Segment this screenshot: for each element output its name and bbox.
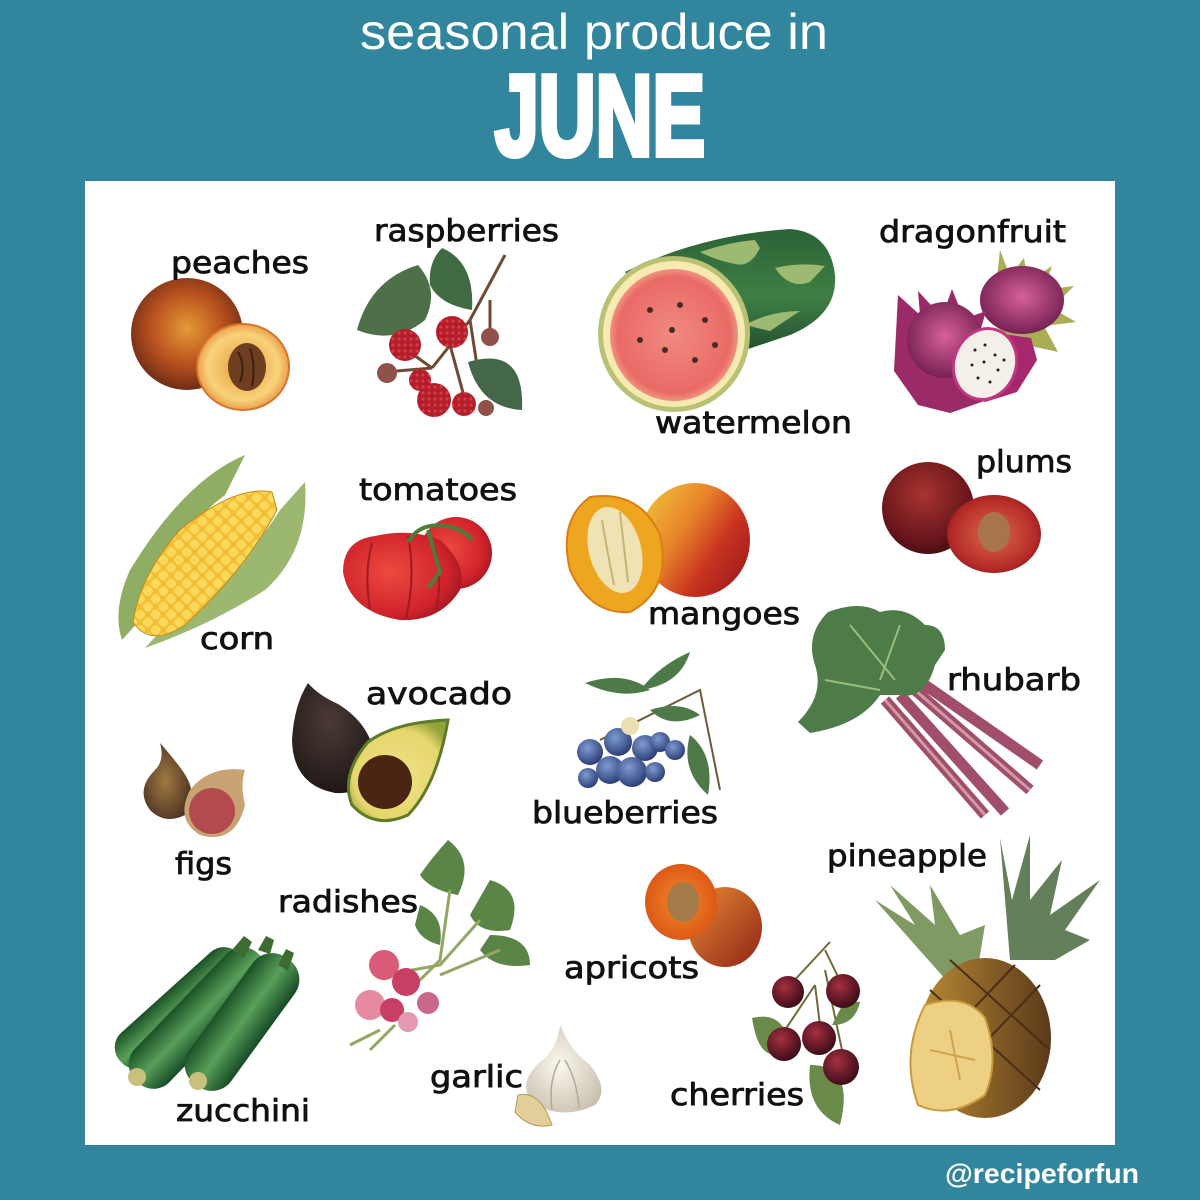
item: watermelon: watermelon (655, 406, 852, 441)
item: figs: figs (175, 847, 232, 882)
title (360, 4, 828, 180)
item: corn (118, 455, 306, 657)
item: cherries (670, 942, 860, 1125)
item: blueberries: blueberries (532, 796, 718, 831)
item: apricots (564, 864, 762, 986)
item: garlic (430, 1025, 601, 1126)
subtitle: seasonal produce in: seasonal produce in (360, 4, 828, 60)
item: rhubarb (798, 606, 1081, 815)
item: raspberries: raspberries (374, 214, 559, 249)
item: garlic: garlic (430, 1060, 523, 1095)
heading: JUNE: JUNE (495, 53, 705, 180)
item: plums: plums (976, 445, 1072, 480)
item: blueberries (532, 652, 720, 831)
item: mangoes: mangoes (648, 597, 800, 632)
item: figs (144, 743, 245, 882)
item: peaches (131, 246, 309, 410)
item: watermelon (598, 229, 852, 441)
item: raspberries (357, 214, 559, 417)
item: tomatoes: tomatoes (359, 473, 517, 508)
item: cherries: cherries (670, 1078, 804, 1113)
item: dragonfruit: dragonfruit (879, 215, 1066, 250)
item: radishes (278, 840, 530, 1050)
item: apricots: apricots (564, 951, 699, 986)
item: radishes: radishes (278, 885, 418, 920)
item: rhubarb: rhubarb (947, 663, 1081, 698)
item: avocado: avocado (366, 677, 512, 712)
item: dragonfruit (879, 215, 1076, 413)
item: mangoes (567, 483, 800, 632)
item: peaches: peaches (171, 246, 309, 281)
item: pineapple (827, 835, 1100, 1118)
item: corn: corn (200, 622, 274, 657)
item: tomatoes (343, 473, 517, 620)
item: plums (882, 445, 1072, 573)
item: zucchini (106, 936, 310, 1129)
item: avocado (292, 677, 512, 821)
panel: produce chart (85, 181, 1115, 1145)
item: pineapple: pineapple (827, 839, 987, 874)
credit: @recipeforfun: @recipeforfun (945, 1158, 1139, 1189)
item: zucchini: zucchini (176, 1094, 310, 1129)
